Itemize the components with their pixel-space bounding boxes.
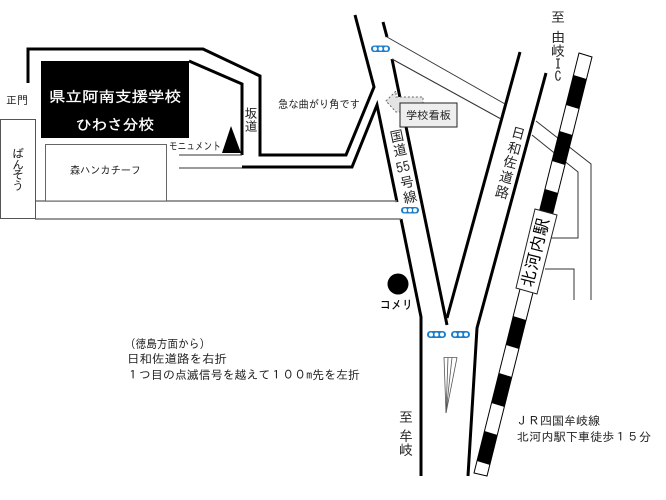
label: to Mugi: 牟 bbox=[399, 429, 413, 443]
label: school sign bbox=[400, 103, 457, 127]
directions text: （徳島方面から） bbox=[125, 337, 210, 350]
label: route 55: 道 bbox=[392, 142, 408, 158]
label: to Yuki IC: C bbox=[554, 69, 562, 83]
building: Bansou: う bbox=[12, 180, 24, 192]
label: to Yuki IC: 至 bbox=[551, 10, 565, 24]
traffic signal: south east bbox=[451, 331, 470, 338]
traffic signal: south west bbox=[427, 331, 446, 338]
railway line bbox=[474, 53, 592, 476]
landmark: Komeri bbox=[380, 274, 413, 311]
label: route 55 bbox=[389, 128, 418, 205]
label: Hiwasa road: 佐 bbox=[502, 154, 519, 171]
landmark: Komeri: コメリ bbox=[380, 299, 413, 311]
road: school approach inner wall bbox=[189, 61, 397, 202]
label: route 55: 号 bbox=[399, 174, 415, 190]
directions text: 日和佐道路を右折 bbox=[127, 352, 227, 365]
traffic signal: shop road bbox=[401, 207, 419, 214]
railway access text bbox=[516, 414, 651, 443]
road: school approach outer wall bbox=[28, 15, 374, 155]
label: slope bbox=[244, 107, 258, 133]
label: sharp bend: 急な曲がり角です bbox=[278, 98, 360, 110]
icon: monument triangle bbox=[222, 126, 241, 153]
road to the shop and school bbox=[35, 201, 401, 219]
building: Bansou: ん bbox=[12, 159, 24, 171]
road: national route 55 east edge bbox=[383, 22, 447, 325]
label: to Mugi bbox=[399, 410, 413, 457]
label: Hiwasa road: 日 bbox=[510, 125, 527, 142]
road: Hiwasa road bbox=[447, 52, 546, 476]
building: Bansou bbox=[0, 120, 36, 218]
station sign: Kitagawachi: 北河内駅 bbox=[519, 217, 552, 289]
side roads bbox=[179, 37, 591, 300]
building: Mori Handkerchief bbox=[46, 144, 166, 201]
school building: ひわさ分校 bbox=[76, 117, 154, 132]
label: Hiwasa road: 道 bbox=[498, 169, 515, 186]
label: slope: 道 bbox=[244, 120, 258, 133]
directions text bbox=[125, 337, 360, 381]
building: Bansou: ば bbox=[12, 147, 24, 160]
station sign: Kitagawachi bbox=[516, 209, 557, 294]
railway access text: ＪＲ四国牟岐線 bbox=[516, 414, 600, 427]
building: Bansou: そ bbox=[12, 169, 24, 181]
label: to Mugi: 至 bbox=[399, 410, 413, 424]
icon: dashed arrow to school sign bbox=[386, 91, 423, 112]
school building bbox=[41, 61, 189, 138]
label: school sign: 学校看板 bbox=[406, 109, 451, 121]
directions text: １つ目の点滅信号を越えて１００m先を左折 bbox=[127, 368, 360, 381]
label: route 55: 国 bbox=[389, 128, 405, 144]
road median marking bbox=[444, 358, 457, 413]
label: route 55: 55 bbox=[395, 159, 411, 175]
road: national route 55 west edge bbox=[401, 219, 421, 476]
label: route 55: 線 bbox=[402, 189, 418, 205]
label: Hiwasa road: 路 bbox=[494, 184, 511, 201]
label: slope: 坂 bbox=[244, 107, 258, 120]
school building: 県立阿南支援学校 bbox=[49, 89, 181, 104]
label: to Yuki IC: 由 bbox=[551, 30, 565, 44]
label: to Yuki IC bbox=[551, 10, 565, 83]
label: monument: モニュメント bbox=[169, 141, 221, 152]
label: Hiwasa road bbox=[494, 125, 527, 201]
traffic signal: north bbox=[371, 46, 390, 52]
building: Mori Handkerchief: 森ハンカチーフ bbox=[70, 165, 141, 176]
label: to Mugi: 岐 bbox=[399, 443, 413, 457]
label: main gate: 正門 bbox=[6, 95, 28, 106]
label: Hiwasa road: 和 bbox=[506, 140, 523, 157]
label: to Yuki IC: 岐 bbox=[551, 44, 565, 58]
railway access text: 北河内駅下車徒歩１５分 bbox=[517, 431, 651, 443]
label: to Yuki IC: I bbox=[554, 57, 562, 71]
